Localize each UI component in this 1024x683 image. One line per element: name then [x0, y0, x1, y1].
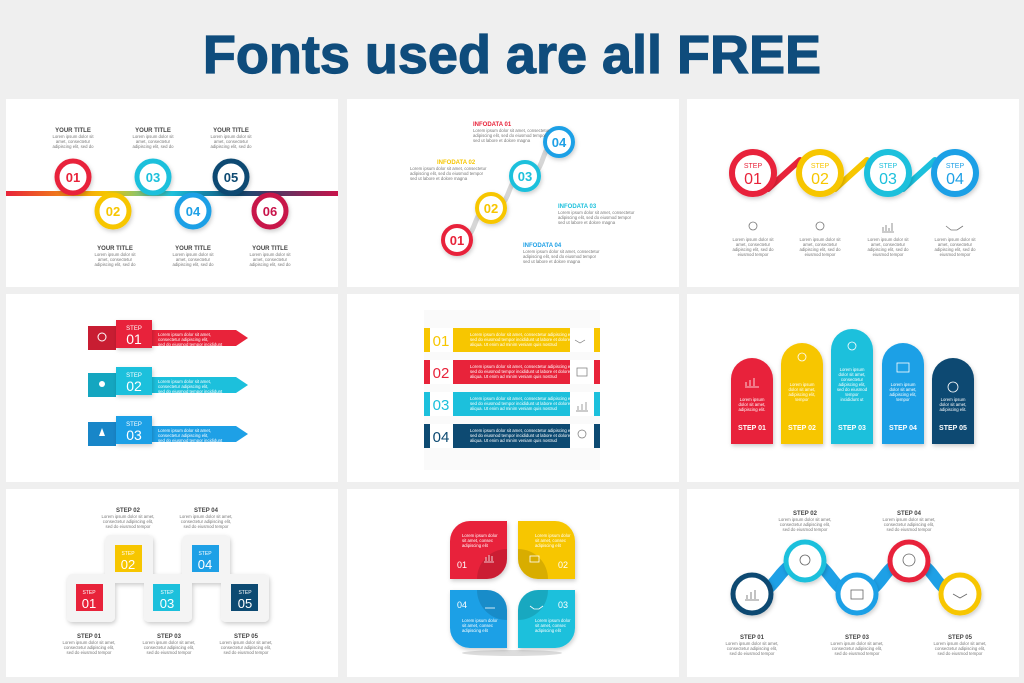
panel: square steps: STEP — [82, 590, 96, 596]
panel: timeline 6 steps: adipiscing elit, sed do — [94, 262, 136, 267]
panel: square steps: sed do eiusmod tempor — [224, 650, 269, 655]
panel: arrow steps: Lorem ipsum dolor sit amet, — [158, 379, 211, 384]
panel: circle chain: consectetur adipiscing elit, — [884, 522, 934, 527]
panel: arrow steps: consectetur adipiscing elit, — [158, 384, 208, 389]
panel: 4 step circles: amet, consectetur — [803, 242, 838, 247]
panel: circle chain — [687, 489, 1019, 677]
panel: 4 step circles: amet, consectetur — [871, 242, 906, 247]
panel: timeline 6 steps: 01 — [66, 170, 80, 185]
panel: timeline 6 steps: 04 — [186, 204, 201, 219]
panel: diagonal infodata: 03 — [518, 169, 532, 184]
panel: 4 step circles: STEP — [811, 163, 829, 170]
panel: diagonal infodata: adipiscing elit, sed do eiusmod tempor — [523, 254, 597, 259]
panel: square steps: consectetur adipiscing elit, — [103, 519, 153, 524]
panel: 4 step circles: Lorem ipsum dolor sit — [732, 237, 774, 242]
panel: quadrant square: 03 — [558, 600, 568, 610]
panel: timeline 6 steps: amet, consectetur — [136, 139, 171, 144]
panel: square steps: consectetur adipiscing elit, — [144, 645, 194, 650]
panel: timeline 6 steps: adipiscing elit, sed do — [132, 144, 174, 149]
panel: arrow steps: sed do eiusmod tempor incididunt — [158, 342, 223, 347]
panel: circle chain: consectetur adipiscing elit, — [780, 522, 830, 527]
panel: 4 step circles: eiusmod tempor — [873, 252, 904, 257]
panel: 4 step circles: adipiscing elit, sed do — [934, 247, 976, 252]
panel: 4 step circles: eiusmod tempor — [805, 252, 836, 257]
panel: square steps: STEP — [238, 590, 252, 596]
panel: 4 step circles: 01 — [744, 171, 762, 188]
panel: 4 step circles: Lorem ipsum dolor sit — [799, 237, 841, 242]
panel: square steps: STEP 05 — [234, 634, 259, 640]
panel: quadrant square: Lorem ipsum dolor — [462, 533, 498, 538]
panel: circle chain: Lorem ipsum dolor sit amet, — [778, 517, 832, 522]
panel: quadrant square: sit amet, consec — [462, 623, 494, 628]
panel: square steps: consectetur adipiscing elit, — [181, 519, 231, 524]
panel: timeline 6 steps: adipiscing elit, sed do — [210, 144, 252, 149]
panel: horizontal bands: 03 — [433, 397, 449, 414]
panel: horizontal bands — [347, 294, 679, 482]
panel: arrow steps: STEP — [126, 373, 142, 379]
panel: rounded bars: adipiscing elit. — [940, 407, 966, 412]
panel: arrow steps: 01 — [126, 331, 142, 347]
panel: timeline 6 steps: Lorem ipsum dolor sit — [94, 252, 136, 257]
panel: rounded bars: Lorem ipsum — [891, 382, 916, 387]
panel: quadrant square: Lorem ipsum dolor — [462, 618, 498, 623]
panel: rounded bars: consectetur — [841, 377, 864, 382]
panel: square steps: sed do eiusmod tempor — [184, 524, 229, 529]
panel: timeline 6 steps: 06 — [263, 204, 277, 219]
panel: timeline 6 steps: Lorem ipsum dolor sit — [132, 134, 174, 139]
panel: arrow steps: sed do eiusmod tempor incididunt — [158, 389, 223, 394]
panel: horizontal bands: 01 — [433, 333, 449, 350]
panel: timeline 6 steps: amet, consectetur — [253, 257, 288, 262]
panel: timeline 6 steps: 02 — [106, 204, 120, 219]
panel: square steps: Lorem ipsum dolor sit amet, — [142, 640, 196, 645]
panel: square steps: consectetur adipiscing elit, — [64, 645, 114, 650]
panel: diagonal infodata: sed ut labore et dolore magna — [410, 176, 468, 181]
panel: timeline 6 steps: YOUR TITLE — [252, 246, 288, 252]
panel: circle chain: STEP 05 — [948, 635, 973, 641]
panel: 4 step circles: STEP — [744, 163, 762, 170]
panel: arrow steps: STEP — [126, 326, 142, 332]
panel: horizontal bands: 02 — [433, 365, 449, 382]
panel: arrow steps: consectetur adipiscing elit, — [158, 337, 208, 342]
panel: rounded bars: adipiscing elit, — [838, 382, 866, 387]
panel: timeline 6 steps: amet, consectetur — [98, 257, 133, 262]
panel: timeline 6 steps: YOUR TITLE — [97, 246, 133, 252]
panel: diagonal infodata: Lorem ipsum dolor sit amet, consectetur — [410, 166, 487, 171]
panel: square steps: STEP — [198, 551, 212, 557]
panel: quadrant square: sit amet, consec — [535, 538, 567, 543]
panel: arrow steps: sed do eiusmod tempor incididunt — [158, 438, 223, 443]
panel: timeline 6 steps: amet, consectetur — [214, 139, 249, 144]
panel: diagonal infodata: Lorem ipsum dolor sit amet, consectetur — [523, 249, 600, 254]
panel: horizontal bands: sed do eiusmod tempor incididunt ut labore et dolore — [470, 337, 571, 342]
panel: diagonal infodata: adipiscing elit, sed do eiusmod tempor — [410, 171, 484, 176]
panel: timeline 6 steps: YOUR TITLE — [213, 128, 249, 134]
panel: rounded bars: STEP 05 — [939, 425, 967, 432]
panel: diagonal infodata: INFODATA 01 — [473, 122, 512, 128]
panel: arrow steps: 03 — [126, 427, 142, 443]
panel: 4 step circles — [687, 99, 1019, 287]
panel: rounded bars: adipiscing elit, — [890, 392, 916, 397]
panel: square steps: 03 — [160, 596, 174, 611]
panel: quadrant square — [347, 489, 679, 677]
panel: diagonal infodata: Lorem ipsum dolor sit amet, consectetur — [473, 128, 550, 133]
panel: arrow steps — [6, 294, 338, 482]
panel: horizontal bands: aliqua. Ut enim ad minim veniam quis nostrud — [470, 342, 558, 347]
panel: horizontal bands: Lorem ipsum dolor sit amet, consectetur adipiscing elit — [470, 428, 574, 433]
panel: diagonal infodata: adipiscing elit, sed do eiusmod tempor — [473, 133, 547, 138]
panel: square steps — [6, 489, 338, 677]
panel: rounded bars: tempor — [845, 392, 859, 397]
panel: quadrant square: adipiscing elit — [535, 543, 562, 548]
panel: diagonal infodata: adipiscing elit, sed do eiusmod tempor — [558, 215, 632, 220]
panel: diagonal infodata: 01 — [450, 233, 464, 248]
panel: square steps: STEP 02 — [116, 508, 141, 514]
panel: timeline 6 steps: Lorem ipsum dolor sit — [249, 252, 291, 257]
panel: arrow steps: Lorem ipsum dolor sit amet, — [158, 332, 211, 337]
panel: timeline 6 steps: adipiscing elit, sed do — [249, 262, 291, 267]
panel: rounded bars: STEP 03 — [838, 425, 866, 432]
panel: circle chain: sed do eiusmod tempor — [783, 527, 828, 532]
panel: rounded bars: dolor sit amet, — [838, 372, 866, 377]
panel: horizontal bands: aliqua. Ut enim ad minim veniam quis nostrud — [470, 374, 558, 379]
panel: rounded bars: Lorem ipsum — [840, 367, 865, 372]
panel: rounded bars: tempor — [896, 397, 910, 402]
panel: quadrant square: 02 — [558, 560, 568, 570]
panel: diagonal infodata: INFODATA 03 — [558, 204, 597, 210]
panel: timeline 6 steps: amet, consectetur — [56, 139, 91, 144]
panel: rounded bars: STEP 01 — [738, 425, 766, 432]
panel: rounded bars: Lorem ipsum — [740, 397, 765, 402]
panel: square steps: Lorem ipsum dolor sit amet, — [179, 514, 233, 519]
panel: square steps: consectetur adipiscing elit, — [221, 645, 271, 650]
panel: quadrant square: Lorem ipsum dolor — [535, 618, 571, 623]
panel: circle chain: Lorem ipsum dolor sit amet, — [933, 641, 987, 646]
panel: rounded bars: STEP 02 — [788, 425, 816, 432]
panel: rounded bars: adipiscing elit, — [788, 392, 816, 397]
panel: horizontal bands: aliqua. Ut enim ad minim veniam quis nostrud — [470, 438, 558, 443]
panel: timeline 6 steps: Lorem ipsum dolor sit — [52, 134, 94, 139]
panel: circle chain: sed do eiusmod tempor — [887, 527, 932, 532]
panel: circle chain: consectetur adipiscing elit, — [935, 646, 985, 651]
panel: quadrant square: sit amet, consec — [462, 538, 494, 543]
panel: square steps: 04 — [198, 557, 212, 572]
panel: 4 step circles: 03 — [879, 171, 897, 188]
panel: timeline 6 steps: YOUR TITLE — [55, 128, 91, 134]
panel: arrow steps: Lorem ipsum dolor sit amet, — [158, 428, 211, 433]
panel: square steps: STEP 03 — [157, 634, 182, 640]
panel: square steps: sed do eiusmod tempor — [147, 650, 192, 655]
panel: timeline 6 steps: Lorem ipsum dolor sit — [210, 134, 252, 139]
panel: square steps: STEP — [121, 551, 135, 557]
panel: diagonal infodata: sed ut labore et dolore magna — [473, 138, 531, 143]
panel: 4 step circles: eiusmod tempor — [940, 252, 971, 257]
panel: square steps: STEP 04 — [194, 508, 219, 514]
panel: circle chain: Lorem ipsum dolor sit amet, — [830, 641, 884, 646]
panel: horizontal bands: Lorem ipsum dolor sit amet, consectetur adipiscing elit — [470, 364, 574, 369]
panel: 4 step circles: adipiscing elit, sed do — [799, 247, 841, 252]
panel: horizontal bands: Lorem ipsum dolor sit amet, consectetur adipiscing elit — [470, 396, 574, 401]
panel: rounded bars: dolor sit amet, — [940, 402, 966, 407]
panel: square steps: Lorem ipsum dolor sit amet, — [101, 514, 155, 519]
panel: square steps: 02 — [121, 557, 135, 572]
title: Fonts used are all FREE — [203, 25, 821, 85]
panel: quadrant square: 04 — [457, 600, 467, 610]
panel: 4 step circles: 02 — [811, 171, 829, 188]
panel: rounded bars: tempor — [795, 397, 809, 402]
panel: horizontal bands: sed do eiusmod tempor incididunt ut labore et dolore — [470, 433, 571, 438]
panel: quadrant square: Lorem ipsum dolor — [535, 533, 571, 538]
panel: diagonal infodata: sed ut labore et dolore magna — [523, 259, 581, 264]
panel: 4 step circles: Lorem ipsum dolor sit — [934, 237, 976, 242]
panel: 4 step circles: STEP — [946, 163, 964, 170]
panel: horizontal bands: Lorem ipsum dolor sit amet, consectetur adipiscing elit — [470, 332, 574, 337]
panel: square steps: Lorem ipsum dolor sit amet, — [219, 640, 273, 645]
panel: horizontal bands: aliqua. Ut enim ad minim veniam quis nostrud — [470, 406, 558, 411]
panel: quadrant square: sit amet, consec — [535, 623, 567, 628]
panel: 4 step circles: eiusmod tempor — [738, 252, 769, 257]
panel: circle chain: consectetur adipiscing elit, — [727, 646, 777, 651]
panel: timeline 6 steps: amet, consectetur — [176, 257, 211, 262]
panel: timeline 6 steps: 05 — [224, 170, 238, 185]
panel: diagonal infodata: INFODATA 04 — [523, 243, 562, 249]
panel: 4 step circles: STEP — [879, 163, 897, 170]
panel: timeline 6 steps: adipiscing elit, sed do — [52, 144, 94, 149]
panel: 4 step circles: amet, consectetur — [938, 242, 973, 247]
panel: rounded bars: Lorem ipsum — [941, 397, 966, 402]
panel: timeline 6 steps — [6, 99, 338, 287]
panel: square steps: STEP — [160, 590, 174, 596]
panel: circle chain: Lorem ipsum dolor sit amet, — [725, 641, 779, 646]
panel: square steps: STEP 01 — [77, 634, 102, 640]
panel: diagonal infodata: 02 — [484, 201, 498, 216]
panel: diagonal infodata — [347, 99, 679, 287]
panel: rounded bars: dolor sit amet, — [890, 387, 916, 392]
panel: quadrant square: adipiscing elit — [535, 628, 562, 633]
panel: square steps: Lorem ipsum dolor sit amet, — [62, 640, 116, 645]
panel: rounded bars: dolor sit amet, — [788, 387, 816, 392]
panel: circle chain: consectetur adipiscing elit, — [832, 646, 882, 651]
panel: arrow steps: 02 — [126, 378, 142, 394]
panel: rounded bars: STEP 04 — [889, 425, 917, 432]
panel: square steps: sed do eiusmod tempor — [106, 524, 151, 529]
panel: timeline 6 steps: YOUR TITLE — [135, 128, 171, 134]
panel: circle chain: sed do eiusmod tempor — [730, 651, 775, 656]
panel: diagonal infodata: Lorem ipsum dolor sit amet, consectetur — [558, 210, 635, 215]
panel: timeline 6 steps: adipiscing elit, sed do — [172, 262, 214, 267]
panel: quadrant square: adipiscing elit — [462, 543, 489, 548]
panel: square steps: 01 — [82, 596, 96, 611]
panel: rounded bars: adipiscing elit. — [738, 407, 766, 412]
panel: 4 step circles: adipiscing elit, sed do — [867, 247, 909, 252]
panel: 4 step circles: adipiscing elit, sed do — [732, 247, 774, 252]
panel: quadrant square: 01 — [457, 560, 467, 570]
panel: horizontal bands: 04 — [433, 429, 449, 446]
panel: circle chain: Lorem ipsum dolor sit amet, — [882, 517, 936, 522]
panel: timeline 6 steps: Lorem ipsum dolor sit — [172, 252, 214, 257]
panel: timeline 6 steps: 03 — [146, 170, 160, 185]
panel: circle chain: STEP 02 — [793, 511, 818, 517]
panel: arrow steps: consectetur adipiscing elit, — [158, 433, 208, 438]
panel: horizontal bands: sed do eiusmod tempor incididunt ut labore et dolore — [470, 401, 571, 406]
panel: horizontal bands: sed do eiusmod tempor incididunt ut labore et dolore — [470, 369, 571, 374]
panel: square steps: sed do eiusmod tempor — [67, 650, 112, 655]
panel: timeline 6 steps: YOUR TITLE — [175, 246, 211, 252]
panel: diagonal infodata: 04 — [552, 135, 567, 150]
panel: rounded bars: sed do eiusmod — [837, 387, 868, 392]
panel: quadrant square: adipiscing elit — [462, 628, 489, 633]
panel: diagonal infodata: sed ut labore et dolore magna — [558, 220, 616, 225]
panel: circle chain: sed do eiusmod tempor — [938, 651, 983, 656]
panel: square steps: 05 — [238, 596, 252, 611]
panel: circle chain: STEP 04 — [897, 511, 922, 517]
panel: circle chain: sed do eiusmod tempor — [835, 651, 880, 656]
panel: diagonal infodata: INFODATA 02 — [437, 160, 476, 166]
panel: 4 step circles: Lorem ipsum dolor sit — [867, 237, 909, 242]
panel: rounded bars: Lorem ipsum — [790, 382, 815, 387]
panel: rounded bars: incididunt ut — [841, 397, 864, 402]
panel: rounded bars — [687, 294, 1019, 482]
panel: circle chain: STEP 03 — [845, 635, 870, 641]
panel: 4 step circles: amet, consectetur — [736, 242, 771, 247]
panel: circle chain: STEP 01 — [740, 635, 765, 641]
panel: rounded bars: dolor sit amet, — [738, 402, 766, 407]
panel: 4 step circles: 04 — [946, 171, 964, 188]
panel: arrow steps: STEP — [126, 422, 142, 428]
